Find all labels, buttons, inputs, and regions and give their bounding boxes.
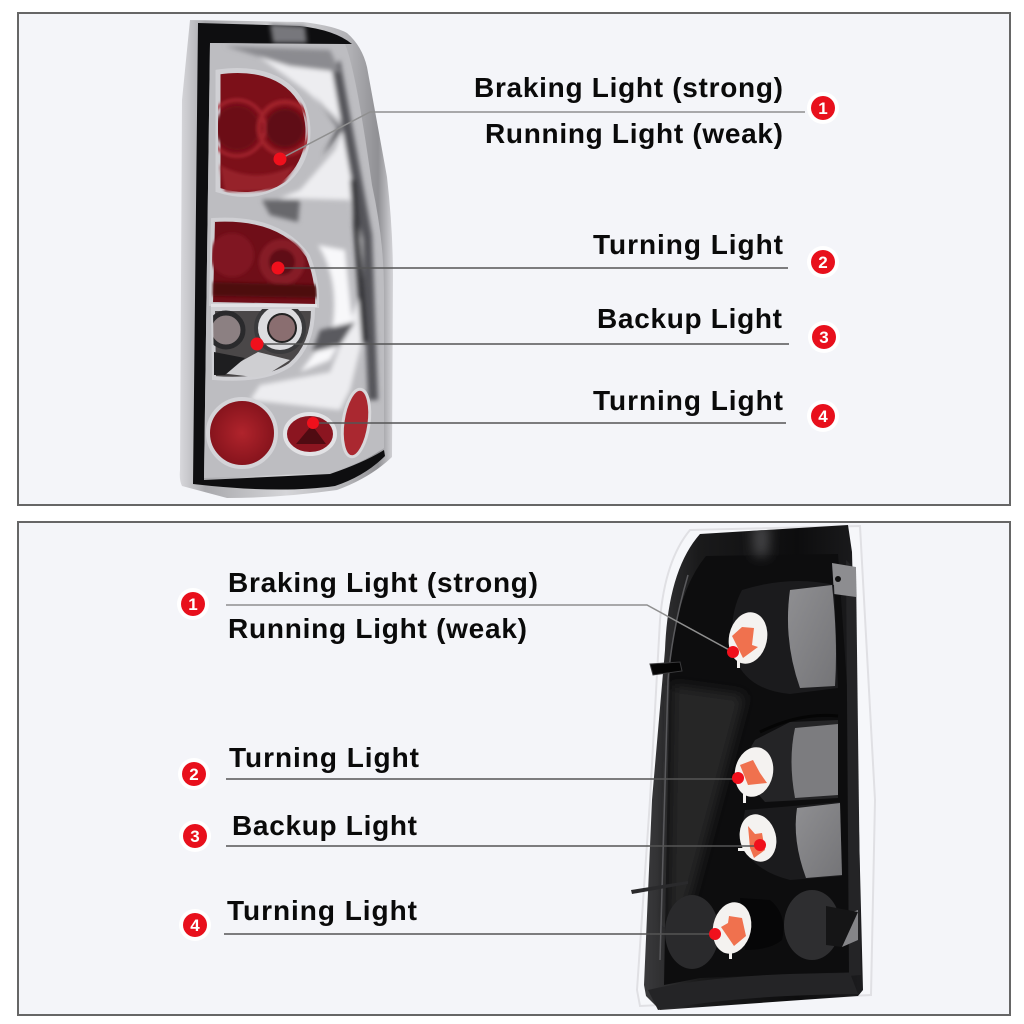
panel: front view bbox=[18, 13, 1010, 505]
panel: rear view bbox=[18, 522, 1010, 1015]
callout 4 rear: turning light: 4 bbox=[190, 916, 200, 935]
callout 1 front: braking and running light: Braking Light (strong) bbox=[474, 72, 783, 103]
callout 1 front: braking and running light bbox=[274, 72, 839, 166]
bulb socket 2 bbox=[730, 744, 778, 803]
upper red lens bbox=[209, 71, 311, 195]
bulb socket 3 bbox=[735, 810, 781, 866]
bottom curve ledge bbox=[648, 973, 858, 1010]
housing 1 bbox=[732, 581, 838, 694]
tail light: rear view photo bbox=[631, 525, 875, 1010]
callout 4 front: turning light: Turning Light bbox=[593, 385, 783, 416]
callout 4 front: turning light: 4 bbox=[818, 407, 828, 426]
side reflector bbox=[338, 388, 374, 458]
housing 2 bbox=[747, 715, 838, 802]
callout 2 rear: turning light: 2 bbox=[189, 765, 199, 784]
callout 2 rear: turning light bbox=[178, 742, 744, 790]
clip and tabs bbox=[631, 563, 858, 947]
small turning lens bbox=[285, 414, 335, 454]
housing 4 and caps bbox=[665, 890, 858, 969]
callout 3 front: backup light: Backup Light bbox=[597, 303, 782, 334]
right rail bbox=[846, 560, 861, 976]
bulb socket 4 bbox=[708, 899, 756, 959]
callout 4 rear: turning light bbox=[179, 895, 721, 941]
callout 2 front: turning light: 2 bbox=[818, 253, 828, 272]
tail light: front view photo bbox=[180, 20, 393, 498]
housing 3 bbox=[740, 802, 842, 880]
callout 3 rear: backup light: 3 bbox=[190, 827, 200, 846]
callout 3 front: backup light bbox=[250, 303, 840, 353]
callout 1 rear: braking and running light: 1 bbox=[188, 595, 198, 614]
backup clear lens bbox=[209, 304, 313, 379]
middle red lens bbox=[210, 220, 317, 307]
callout 1 front: braking and running light: Running Light (weak) bbox=[485, 118, 783, 149]
callout 1 rear: braking and running light: Braking Light (strong) bbox=[228, 567, 538, 598]
callout 4 front: turning light bbox=[307, 385, 839, 432]
callout 4 rear: turning light: Turning Light bbox=[227, 895, 417, 926]
callout 1 rear: braking and running light: Running Light (weak) bbox=[228, 613, 527, 644]
callout 3 rear: backup light: Backup Light bbox=[232, 810, 417, 841]
callout 2 front: turning light bbox=[272, 229, 839, 278]
callout 2 front: turning light: Turning Light bbox=[593, 229, 783, 260]
callout 3 rear: backup light bbox=[179, 810, 766, 852]
callout 3 front: backup light: 3 bbox=[819, 328, 829, 347]
callout 1 rear: braking and running light bbox=[177, 567, 739, 658]
bulb socket 1 bbox=[724, 609, 772, 668]
callout 2 rear: turning light: Turning Light bbox=[229, 742, 419, 773]
callout 1 front: braking and running light: 1 bbox=[818, 99, 828, 118]
round reflector bbox=[208, 399, 276, 467]
